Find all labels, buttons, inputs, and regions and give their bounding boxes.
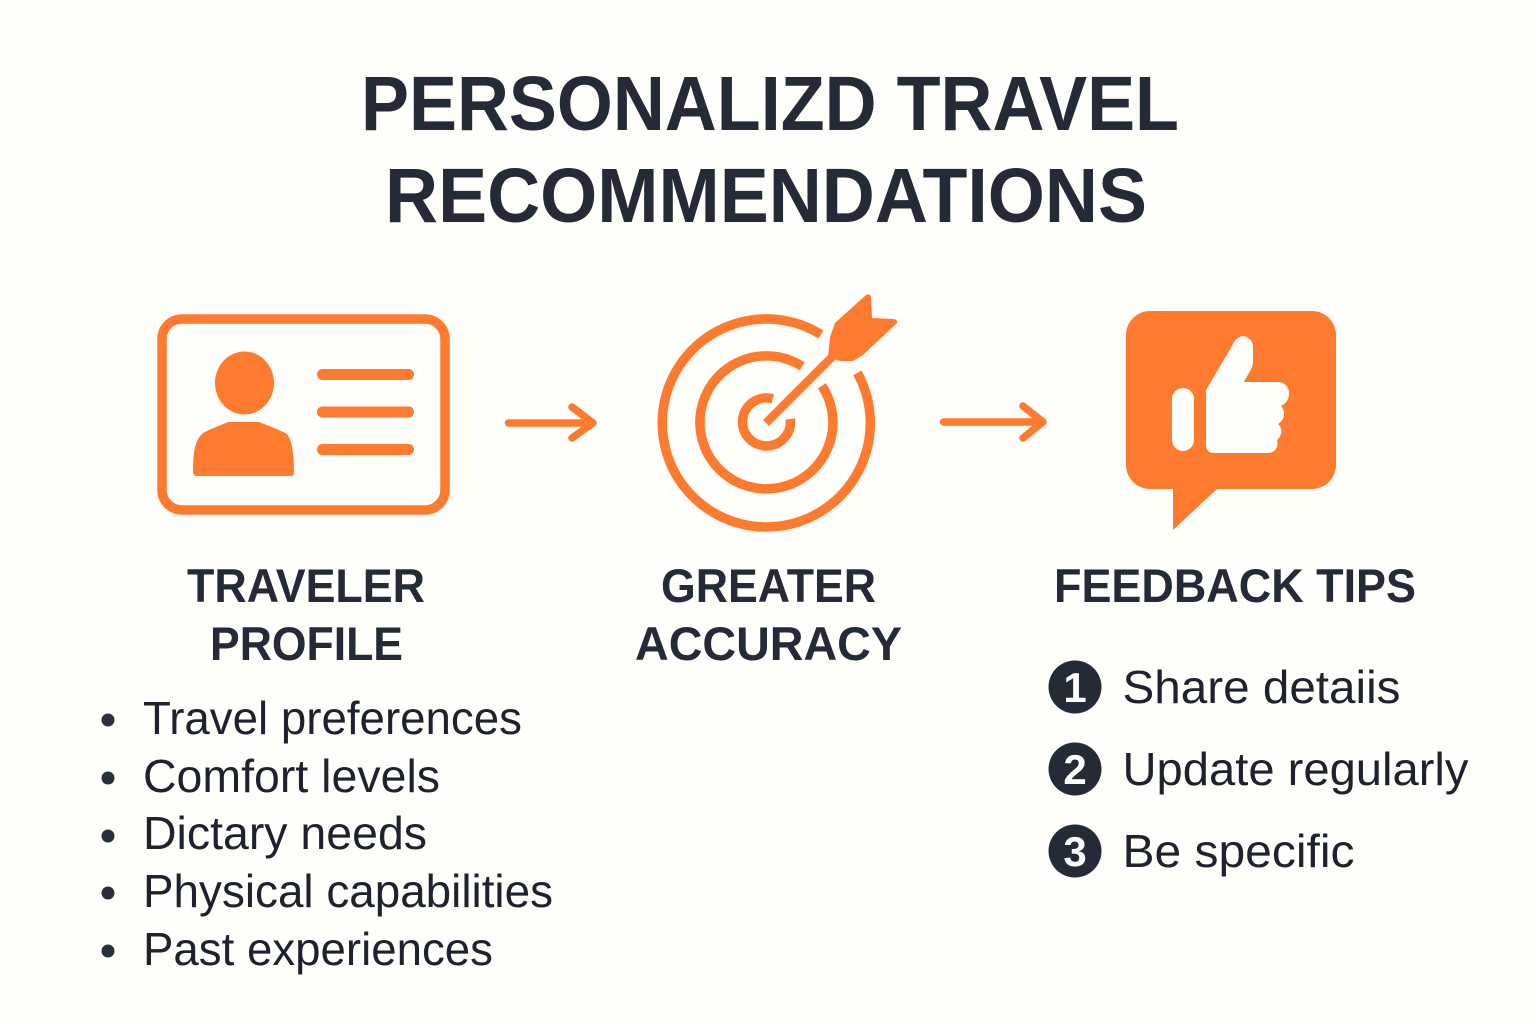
list: feedback tips steps: 2 <box>1063 746 1087 793</box>
list: feedback tips steps <box>1048 660 1468 878</box>
list: traveler profile items <box>102 692 553 975</box>
list: traveler profile items: Past experiences <box>143 923 493 975</box>
list: traveler profile items: Dictary needs <box>143 807 427 859</box>
list: feedback tips steps: Be specific <box>1122 825 1354 877</box>
list: traveler profile items: Comfort levels <box>143 750 440 802</box>
heading: greater accuracy: GREATER <box>661 559 876 612</box>
title <box>361 61 1179 239</box>
heading: feedback tips: FEEDBACK TIPS <box>1054 559 1416 612</box>
icon: thumbs up speech bubble <box>1126 311 1336 530</box>
icon: traveler profile ID card <box>162 319 445 510</box>
heading: traveler profile: PROFILE <box>210 617 403 670</box>
heading: greater accuracy: ACCURACY <box>635 617 902 670</box>
title: RECOMMENDATIONS <box>385 153 1147 239</box>
list: traveler profile items: Physical capabilities <box>143 865 553 917</box>
list: traveler profile items: Travel preferences <box>143 692 522 744</box>
list: feedback tips steps: 3 <box>1063 828 1087 875</box>
heading: greater accuracy <box>635 559 902 670</box>
icon: target with arrow <box>662 294 897 527</box>
arrow: accuracy to feedback <box>944 406 1043 438</box>
heading: traveler profile <box>187 559 425 670</box>
heading: traveler profile: TRAVELER <box>187 559 425 612</box>
list: feedback tips steps: Share detaiis <box>1122 661 1400 713</box>
list: feedback tips steps: 1 <box>1063 664 1087 711</box>
title: PERSONALIZD TRAVEL <box>361 61 1179 147</box>
list: feedback tips steps: Update regularly <box>1122 743 1468 795</box>
arrow: profile to accuracy <box>508 407 593 438</box>
